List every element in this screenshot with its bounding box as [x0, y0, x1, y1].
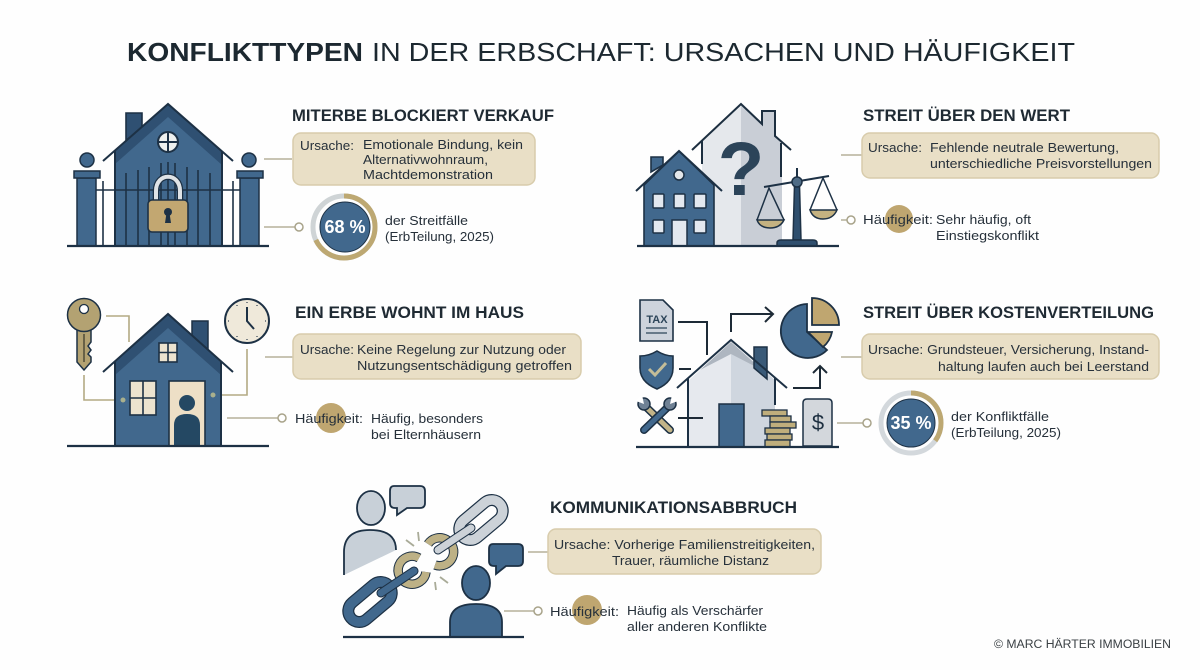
ring chart: 35 %: 35 % [890, 413, 932, 433]
frequency text: Sehr häufig, oft [936, 212, 1031, 227]
connector with dot [227, 414, 286, 422]
statistic text: (ErbTeilung, 2025) [385, 229, 494, 244]
frequency text: Häufig als Verschärfer [627, 603, 764, 618]
callout: Ursache [862, 334, 1159, 379]
statistic text [951, 409, 1061, 440]
connector [841, 154, 862, 156]
connector [265, 356, 293, 358]
connector [528, 551, 548, 553]
connector with dot [264, 223, 303, 231]
callout: Ursache: unterschiedliche Preisvorstellungen [930, 156, 1152, 171]
frequency text: Häufigkeit: [863, 212, 933, 227]
connector [841, 356, 862, 358]
frequency text [295, 411, 484, 442]
frequency text: bei Elternhäusern [371, 427, 481, 442]
callout: Ursache [293, 334, 581, 379]
callout: Ursache: Ursache: [300, 138, 354, 153]
callout: Ursache: Nutzungsentschädigung getroffen [357, 358, 572, 373]
callout: Ursache: Ursache: [300, 342, 354, 357]
title: KONFLIKTTYPEN [127, 37, 363, 67]
heading: STREIT ÜBER KOSTENVERTEILUNG [863, 303, 1154, 322]
panel: Streit über den Wert [636, 104, 1159, 246]
statistic text: der Konfliktfälle [951, 409, 1049, 424]
frequency badge [316, 403, 346, 433]
panel: Streit über Kostenverteilung [636, 298, 1159, 453]
frequency text: Häufigkeit: [295, 411, 363, 426]
callout: Ursache [862, 133, 1159, 178]
title: IN DER ERBSCHAFT: URSACHEN UND HÄUFIGKEIT [372, 37, 1075, 67]
ring chart: 35 % [881, 393, 941, 453]
frequency text [550, 603, 767, 634]
connector with dot [504, 607, 542, 615]
connector with dot [837, 419, 871, 427]
callout: Ursache: Ursache: Grundsteuer, Versicherung, Instand- [868, 342, 1149, 357]
frequency text: Häufigkeit: [550, 604, 619, 619]
frequency text: Einstiegskonflikt [936, 228, 1039, 243]
statistic text: (ErbTeilung, 2025) [951, 425, 1061, 440]
frequency text [863, 212, 1039, 243]
frequency badge [885, 205, 913, 233]
panel: Kommunikationsabbruch [343, 486, 821, 637]
icon: house with costs: TAX [646, 314, 668, 326]
icon: houses and scale: ? [718, 127, 764, 212]
icon: locked house behind fence [67, 104, 269, 246]
panel: Miterbe blockiert Verkauf [67, 104, 554, 258]
panel: Ein Erbe wohnt im Haus [67, 298, 581, 446]
heading: STREIT ÜBER DEN WERT [863, 106, 1071, 125]
frequency text: Häufig, besonders [371, 411, 484, 426]
icon: people and broken chain [343, 486, 524, 637]
icon: house with key and clock [67, 298, 269, 446]
heading: MITERBE BLOCKIERT VERKAUF [292, 106, 554, 125]
callout: Ursache: Alternativwohnraum, [363, 152, 488, 167]
ring chart: 68 % [313, 196, 375, 258]
callout: Ursache: Emotionale Bindung, kein [363, 137, 523, 152]
heading: KOMMUNIKATIONSABBRUCH [550, 498, 797, 517]
icon: houses and scale [636, 104, 839, 246]
heading: EIN ERBE WOHNT IM HAUS [295, 303, 524, 322]
statistic text: der Streitfälle [385, 213, 468, 228]
copyright: © MARC HÄRTER IMMOBILIEN [994, 639, 1171, 651]
callout: Ursache: Machtdemonstration [363, 167, 493, 182]
connector [264, 158, 292, 160]
ring chart: 68 %: 68 % [324, 217, 366, 237]
callout: Ursache [293, 133, 535, 185]
icon: house with costs: $ [812, 410, 824, 435]
callout: Ursache: Ursache: Vorherige Familienstreitigkeiten, [554, 537, 815, 552]
callout: Ursache: Ursache: [868, 140, 922, 155]
statistic text [385, 213, 494, 244]
frequency badge [572, 595, 602, 625]
callout: Ursache: haltung laufen auch bei Leerstand [938, 359, 1149, 374]
callout: Ursache: Trauer, räumliche Distanz [612, 553, 769, 568]
callout: Ursache [548, 529, 821, 574]
callout: Ursache: Keine Regelung zur Nutzung oder [357, 342, 567, 357]
icon: house with costs [636, 298, 839, 447]
callout: Ursache: Fehlende neutrale Bewertung, [930, 140, 1119, 155]
frequency text: aller anderen Konflikte [627, 619, 767, 634]
connector with dot [841, 216, 855, 224]
title [127, 37, 1075, 67]
